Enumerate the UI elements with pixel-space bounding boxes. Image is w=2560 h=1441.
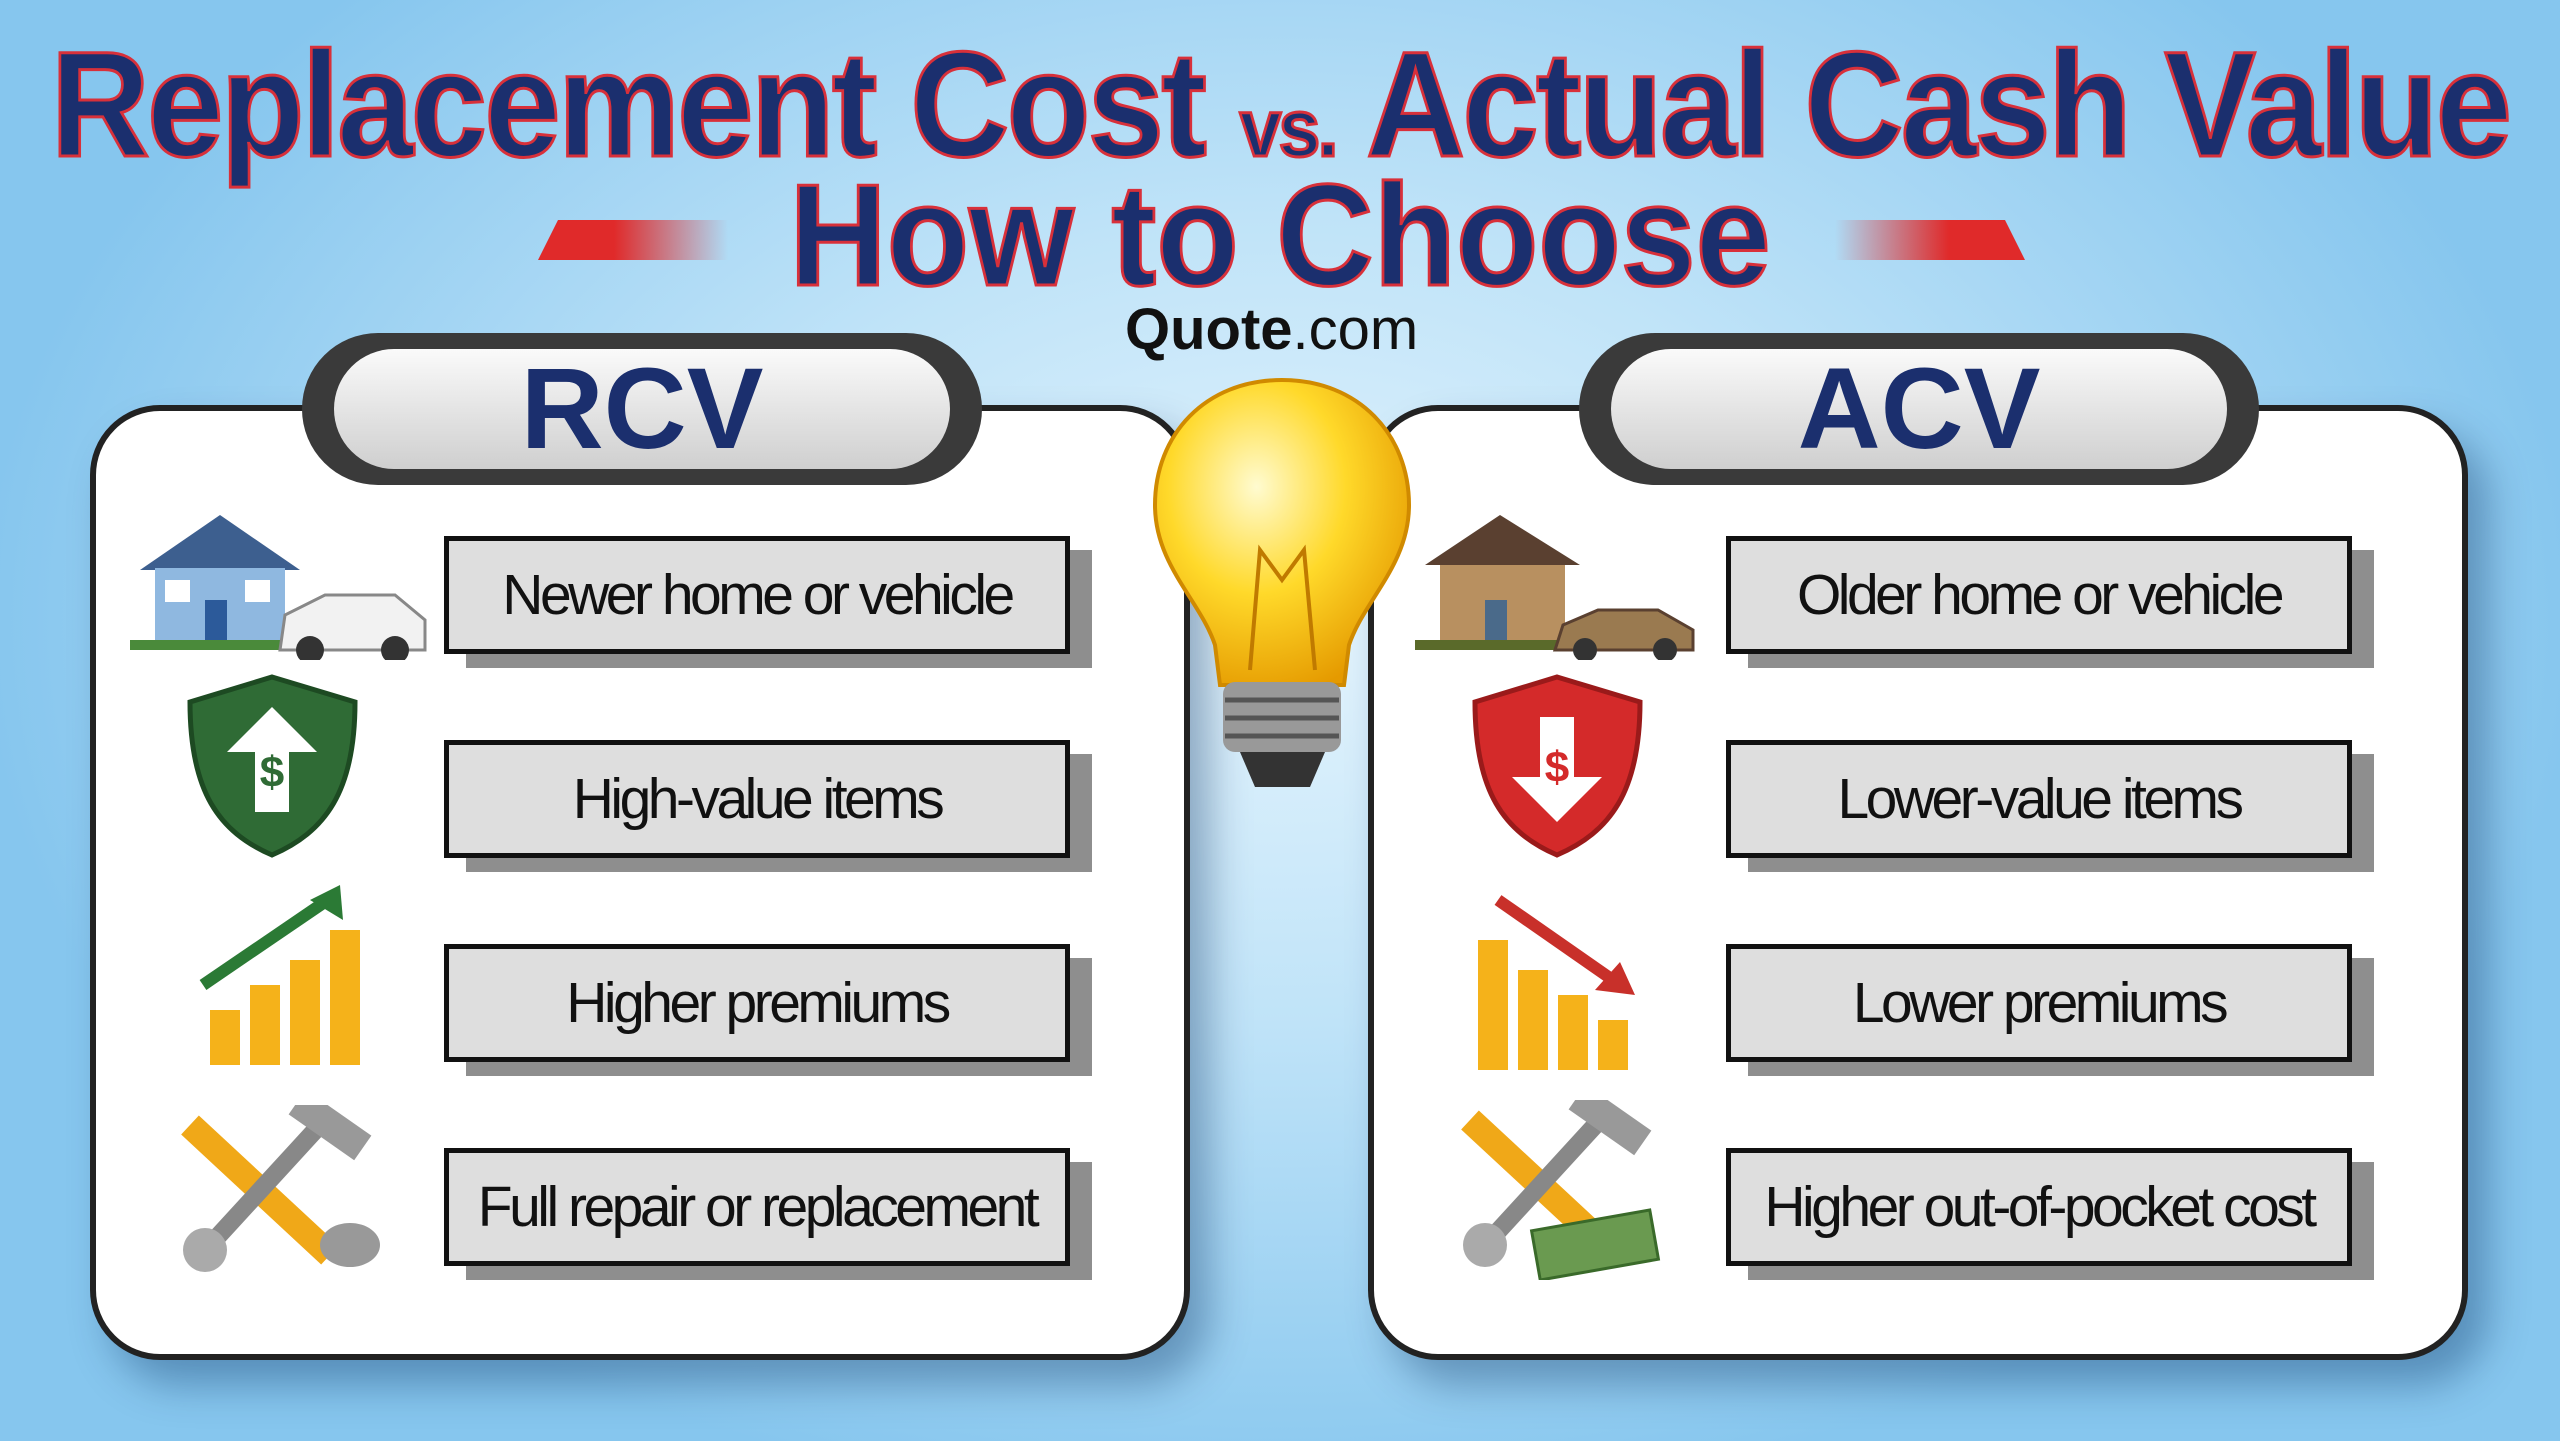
panel: ACV <box>1368 405 2468 1360</box>
row 4 ACV: label <box>1726 1148 2352 1266</box>
subtitle: How to Choose <box>789 154 1771 316</box>
row 2 RCV: icon shield up <box>188 674 358 858</box>
title: Replacement Cost vs. Actual Cash Value <box>51 20 2509 188</box>
row 2 RCV: label <box>444 740 1070 858</box>
decorative red bar right <box>1835 220 2025 260</box>
panel: RCV <box>90 405 1190 1360</box>
row 1 ACV: icon old house & car <box>1415 515 1694 660</box>
row 4 RCV: label: Full repair or replacement <box>478 1175 1036 1239</box>
icon: light bulb <box>1153 378 1411 787</box>
row 2 RCV: icon shield up: $ <box>260 748 284 797</box>
row 3 ACV: icon chart down <box>1478 895 1635 1070</box>
row 3 RCV: label: Higher premiums <box>566 971 948 1035</box>
row 4 ACV: label: Higher out-of-pocket cost <box>1764 1175 2314 1239</box>
row 2 ACV: label <box>1726 740 2352 858</box>
row 1 RCV: icon house & car <box>130 515 426 660</box>
row 4 ACV: icon tools & cash <box>1461 1100 1660 1280</box>
row 2 ACV: icon shield down: $ <box>1545 743 1569 792</box>
row 3 RCV: icon chart up <box>200 885 360 1065</box>
row 2 RCV: label: High-value items <box>573 767 941 831</box>
row 1 ACV: label <box>1726 536 2352 654</box>
row 2 ACV: label: Lower-value items <box>1837 767 2240 831</box>
row 3 RCV: label <box>444 944 1070 1062</box>
row 3 ACV: label: Lower premiums <box>1853 971 2225 1035</box>
row 1 RCV: label: Newer home or vehicle <box>502 563 1012 627</box>
brand: Quote.com <box>1125 297 1418 362</box>
row 4 RCV: icon tools <box>181 1105 380 1272</box>
heading: ACV <box>1579 333 2259 485</box>
row 1 ACV: label: Older home or vehicle <box>1797 563 2281 627</box>
row 3 ACV: label <box>1726 944 2352 1062</box>
decorative red bar left <box>538 220 728 260</box>
heading: RCV: RCV <box>521 345 763 473</box>
heading: RCV <box>302 333 982 485</box>
row 2 ACV: icon shield down <box>1472 674 1642 858</box>
row 4 RCV: label <box>444 1148 1070 1266</box>
row 1 RCV: label <box>444 536 1070 654</box>
heading: ACV: ACV <box>1798 345 2040 473</box>
